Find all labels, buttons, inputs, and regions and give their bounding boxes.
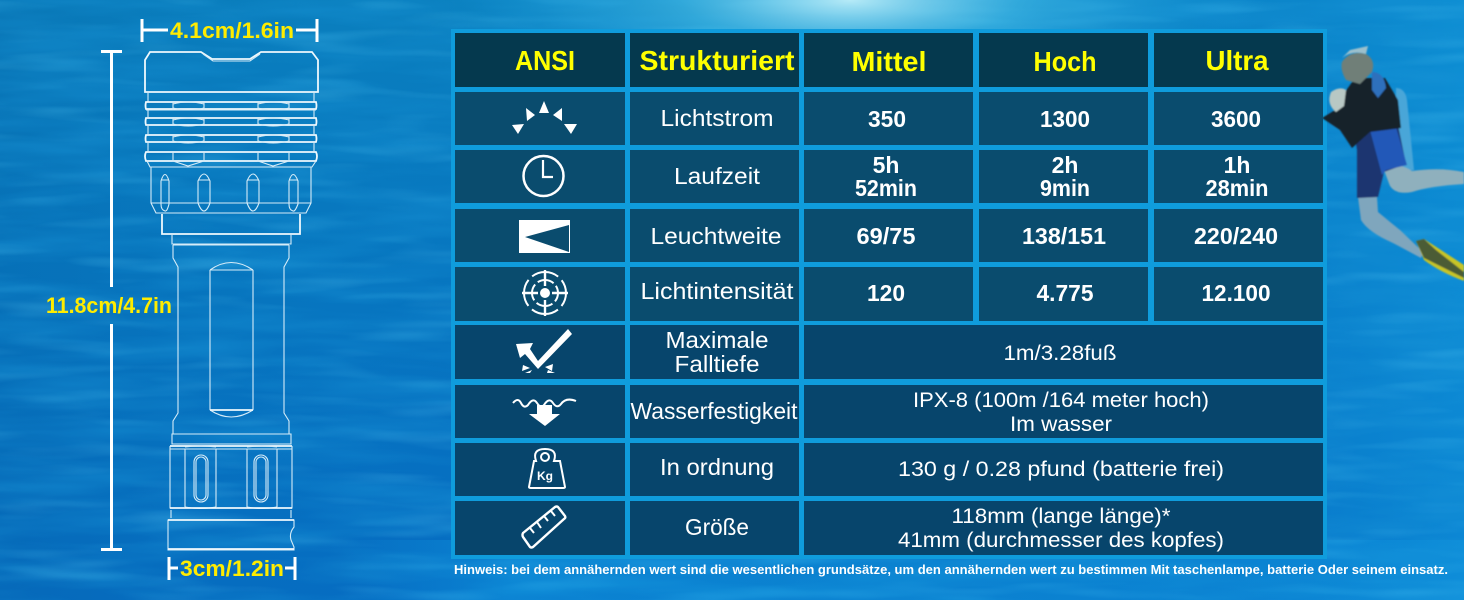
diver: head: [1342, 53, 1373, 84]
diver: fin: [1416, 239, 1464, 281]
dimension: head width: 4.1cm/1.6in: [170, 18, 294, 43]
header row: Mittel: [852, 46, 926, 77]
row: Groesse: 118mm (lange länge)*: [952, 505, 1170, 528]
icon: drop test: [516, 329, 572, 373]
row: Wasserfestigkeit: [455, 385, 1323, 438]
icon: light rays: [512, 101, 577, 134]
row: Maximale Falltiefe: Maximale: [666, 327, 768, 353]
row: Maximale Falltiefe: [455, 325, 1323, 379]
row: Gewicht: In ordnung: [660, 454, 774, 480]
diver: rear leg: [1384, 165, 1464, 193]
row: Lichtintensitaet: 12.100: [1202, 280, 1270, 306]
row: Maximale Falltiefe: 1m/3.28fuß: [1004, 342, 1116, 365]
dimension: length: 11.8cm/4.7in: [46, 293, 172, 318]
header row: Hoch: [1034, 46, 1096, 77]
row: Wasserfestigkeit: Wasserfestigkeit: [630, 398, 798, 424]
row: Laufzeit: 2h: [1052, 152, 1078, 178]
row: Groesse: Größe: [685, 514, 749, 540]
row: Lichtstrom: 1300: [1040, 106, 1090, 132]
diver: air tank: [1396, 88, 1414, 172]
footnote: Hinweis: bei dem annähernden wert sind die wesentlichen grundsätze, um den annähernden wert zu bestimmen Mit taschenlampe, batterie Oder seinem einsatz.: [454, 563, 1448, 577]
icon: weight: [529, 449, 565, 488]
header row: Strukturiert: [640, 45, 794, 76]
row: Gewicht: [455, 443, 1323, 496]
row: Leuchtweite: 220/240: [1194, 223, 1278, 249]
row: Leuchtweite: Leuchtweite: [650, 223, 782, 249]
flashlight tail: [168, 434, 294, 550]
row: Groesse: 41mm (durchmesser des kopfes): [898, 529, 1224, 552]
row: Leuchtweite: 138/151: [1022, 223, 1106, 249]
row: Leuchtweite: 69/75: [856, 223, 916, 249]
row: Lichtstrom: 3600: [1211, 106, 1261, 132]
row: Leuchtweite: [455, 209, 1323, 262]
row: Laufzeit: Laufzeit: [674, 163, 761, 189]
row: Wasserfestigkeit: Im wasser: [1010, 413, 1112, 436]
row: Wasserfestigkeit: IPX-8 (100m /164 meter hoch): [913, 389, 1209, 412]
row: Laufzeit: [455, 150, 1323, 203]
diver: front leg: [1358, 197, 1423, 258]
flashlight line drawing: [145, 52, 318, 550]
row: Laufzeit: 52min: [855, 175, 917, 201]
row: Lichtintensitaet: Lichtintensität: [640, 278, 794, 304]
row: Lichtintensitaet: 120: [867, 280, 905, 306]
row: Laufzeit: 28min: [1206, 175, 1268, 201]
icon: beam distance: [519, 220, 570, 253]
diver: vest and gear: [1322, 78, 1401, 148]
diver photo: [1322, 46, 1464, 281]
row: Maximale Falltiefe: Falltiefe: [674, 351, 760, 377]
dimension: length: [46, 51, 172, 550]
header row: Ultra: [1206, 45, 1269, 76]
dimension: head width: [142, 18, 317, 43]
flashlight bezel with slots: [151, 167, 311, 213]
diver: arm: [1329, 88, 1346, 112]
row: Lichtintensitaet: 4.775: [1036, 280, 1094, 306]
diver: wetsuit: [1354, 125, 1406, 198]
dimension: tail width: 3cm/1.2in: [180, 556, 284, 581]
header row: [455, 33, 1323, 87]
row: Gewicht: 130 g / 0.28 pfund (batterie frei): [898, 458, 1224, 481]
row: Lichtstrom: [455, 92, 1323, 145]
header row: ANSI: [515, 45, 575, 76]
icon: weight: Kg: [537, 469, 553, 483]
row: Laufzeit: 9min: [1040, 175, 1090, 201]
flashlight head: [145, 52, 318, 167]
row: Laufzeit: 5h: [873, 152, 899, 178]
row: Lichtintensitaet: [455, 267, 1323, 321]
icon: ruler: [522, 506, 565, 548]
row: Laufzeit: 1h: [1224, 152, 1250, 178]
comparison table: [455, 33, 1323, 555]
row: Groesse: [455, 501, 1323, 555]
icon: clock: [524, 156, 564, 196]
flashlight body tube: [173, 245, 289, 434]
icon: target: [522, 270, 568, 316]
row: Lichtstrom: 350: [868, 106, 906, 132]
flashlight neck: [162, 214, 300, 245]
icon: water depth: [513, 400, 576, 426]
row: Lichtstrom: Lichtstrom: [660, 105, 774, 131]
